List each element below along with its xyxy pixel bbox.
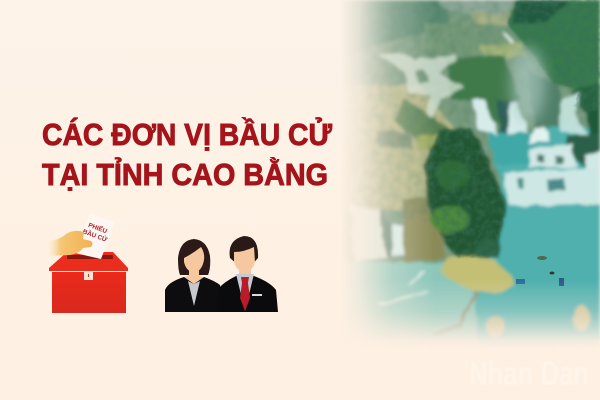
ballot box body: [52, 272, 126, 313]
yellow-green island: [440, 256, 514, 293]
river: [472, 124, 600, 336]
boats: [516, 256, 564, 286]
hand: [47, 231, 92, 256]
mist: [511, 47, 545, 123]
rapids: [378, 272, 428, 305]
photo: Ban Gioc waterfall landscape: [335, 0, 600, 350]
hillside forest: [507, 0, 600, 112]
ballot paper: BẦU CỬ: [82, 226, 110, 244]
sand banks: [573, 305, 591, 331]
central forest and mist: [447, 55, 520, 132]
icon: ballot box with hand: [47, 213, 128, 313]
main waterfalls: [472, 100, 498, 134]
ballot paper: PHIẾU: [87, 219, 109, 235]
woman: [165, 239, 224, 312]
title: CÁC ĐƠN VỊ BẦU CỬ: [42, 116, 333, 152]
upper cascades: [378, 52, 463, 118]
box clasp: [84, 271, 93, 280]
icon: woman and man in suits: [165, 236, 278, 312]
fallen tree root: [433, 292, 478, 335]
title: [42, 116, 333, 192]
land base: [348, 1, 590, 266]
ballot paper: [75, 213, 115, 259]
forest texture: [420, 0, 600, 265]
title: TẠI TỈNH CAO BẰNG: [42, 156, 328, 192]
man: [217, 236, 278, 312]
ballot box lid: [49, 252, 128, 271]
left waterfall: [350, 206, 388, 262]
main forest island: [424, 128, 507, 258]
